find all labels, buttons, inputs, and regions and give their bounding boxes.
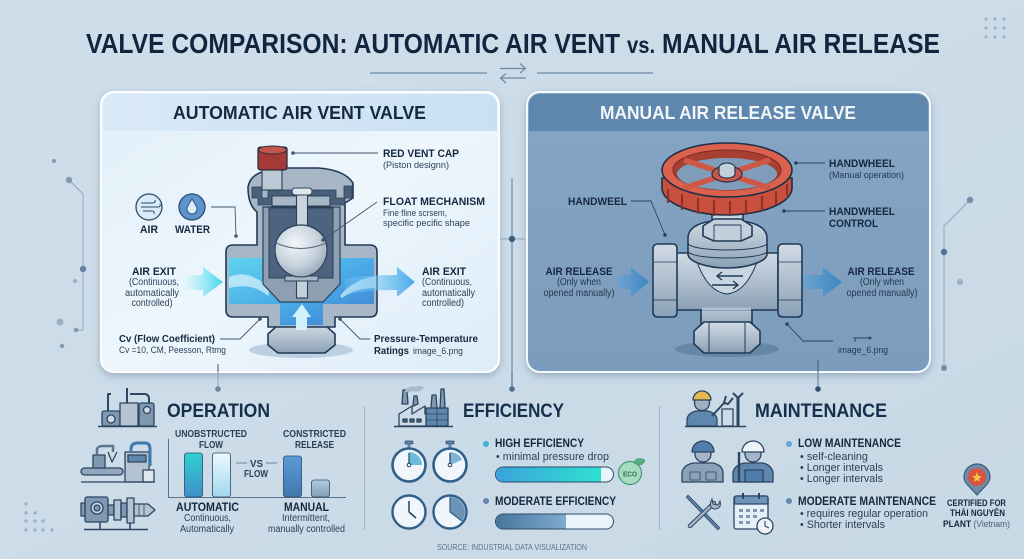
icon: factory bbox=[394, 386, 453, 426]
arrow: left air release bbox=[618, 267, 649, 297]
bar chart: flow comparison: VS bbox=[250, 459, 263, 470]
block: moderate maintenance: • requires regular operation bbox=[800, 508, 928, 520]
label: air exit left bbox=[125, 266, 179, 309]
block: high efficiency: HIGH EFFICIENCY bbox=[495, 438, 584, 450]
section: maintenance bbox=[682, 391, 1010, 534]
block: high efficiency: • minimal pressure drop bbox=[496, 451, 609, 463]
label: image file reference: image_6.png bbox=[838, 345, 888, 356]
top guide bbox=[272, 196, 330, 206]
handwheel inner wall bbox=[673, 150, 781, 190]
label: air exit left: controlled) bbox=[132, 298, 172, 309]
icon: engineer with wrenches bbox=[685, 391, 746, 426]
label: pressure-temperature ratings: Pressure-Temperature bbox=[374, 333, 478, 345]
label: air release right bbox=[846, 266, 918, 299]
right end nut bbox=[778, 244, 802, 317]
icon: clock moderate left bbox=[392, 496, 426, 528]
panel heading: MANUAL AIR RELEASE VALVE bbox=[600, 103, 856, 123]
bar chart: flow comparison: FLOW bbox=[199, 440, 223, 451]
caption: manual bbox=[268, 502, 345, 535]
label: air release right: AIR RELEASE bbox=[848, 266, 914, 278]
arrow: right air flow out bbox=[345, 267, 415, 297]
block: moderate maintenance: MODERATE MAINTENANCE bbox=[798, 496, 936, 508]
block: high efficiency bbox=[483, 438, 614, 482]
block: low maintenance: • Longer intervals bbox=[800, 473, 883, 485]
bar chart: flow comparison: RELEASE bbox=[295, 440, 334, 451]
block: low maintenance bbox=[786, 438, 901, 485]
label: air exit left: (Continuous, bbox=[129, 277, 179, 288]
decoration: operation dot bbox=[215, 386, 221, 392]
label: pressure-temperature ratings bbox=[338, 317, 478, 357]
icon: stopwatch high left bbox=[392, 441, 426, 482]
section: efficiency bbox=[392, 386, 645, 552]
decoration: section dividers bbox=[364, 406, 660, 530]
label: handweel bbox=[568, 196, 667, 237]
label: flow coefficient: Cv (Flow Coefficient) bbox=[119, 333, 215, 345]
legend: air and water: WATER bbox=[175, 224, 210, 236]
label: air exit right: automatically bbox=[422, 288, 475, 299]
label: air exit right: controlled) bbox=[422, 298, 464, 309]
label: handwheel manual operation: HANDWHEEL bbox=[829, 158, 895, 170]
label: air exit right bbox=[422, 266, 475, 309]
caption: manual: MANUAL bbox=[284, 502, 329, 514]
handwheel opening bbox=[677, 158, 777, 190]
legend: air and water: AIR bbox=[140, 224, 158, 236]
label: air release left: opened manually) bbox=[544, 288, 614, 299]
icon: eco badge: ECO bbox=[623, 470, 637, 478]
block: low maintenance: LOW MAINTENANCE bbox=[798, 438, 901, 450]
label: float mechanism bbox=[321, 196, 485, 242]
label: air exit left: AIR EXIT bbox=[132, 266, 176, 278]
bar chart: flow comparison: UNOBSTRUCTED bbox=[175, 429, 247, 440]
decoration: right circuit line bbox=[941, 197, 973, 371]
label: flow coefficient bbox=[119, 317, 262, 355]
icon: calendar with clock bbox=[734, 493, 773, 534]
caption: manual: manually controlled bbox=[268, 524, 345, 535]
panel background bbox=[101, 92, 499, 372]
label: air exit right: AIR EXIT bbox=[422, 266, 466, 278]
handwheel lower rim bbox=[662, 178, 792, 215]
label: air exit left: automatically bbox=[125, 288, 179, 299]
decoration: top right dots bbox=[984, 18, 1006, 38]
label: air release left bbox=[544, 266, 614, 299]
icon: location pin Vietnam bbox=[964, 464, 990, 495]
caption: automatic: Automatically bbox=[180, 524, 234, 535]
neck bbox=[712, 213, 743, 223]
bar chart: flow comparison bbox=[168, 429, 346, 498]
title: VALVE COMPARISON: AUTOMATIC AIR VENT vs. MANUAL AIR RELEASE bbox=[86, 28, 940, 59]
label: handwheel manual operation bbox=[794, 158, 904, 181]
icon: clock moderate right bbox=[434, 496, 466, 528]
decoration: left circuit line bbox=[52, 159, 86, 348]
hub bbox=[712, 166, 742, 182]
red vent cap bbox=[258, 147, 287, 170]
icon: conveyor and robot arm bbox=[81, 443, 155, 482]
icon: automatic valve cross-section bbox=[226, 146, 377, 358]
label: handwheel control: HANDWHEEL bbox=[829, 206, 895, 218]
bonnet bbox=[688, 220, 767, 268]
icon: manual valve with handwheel bbox=[653, 143, 802, 357]
block: moderate efficiency bbox=[483, 496, 616, 529]
horizontal pipe bbox=[675, 253, 778, 310]
caption: manual: Intermittent, bbox=[282, 513, 330, 524]
lower stem bbox=[296, 276, 308, 298]
icon: worker left bbox=[682, 441, 723, 482]
label: handwheel manual operation: (Manual operation) bbox=[829, 170, 904, 181]
label: image file reference bbox=[785, 322, 888, 356]
decoration: panel bottom connectors bbox=[218, 360, 818, 389]
block: moderate efficiency: MODERATE EFFICIENCY bbox=[495, 496, 616, 508]
caption: automatic: Continuous, bbox=[184, 513, 231, 524]
center body bulge bbox=[697, 262, 757, 294]
decoration: center connector bbox=[499, 178, 525, 392]
label: air release left: (Only when bbox=[557, 277, 601, 288]
label: air release left: AIR RELEASE bbox=[546, 266, 612, 278]
vent neck bbox=[262, 168, 282, 190]
icon: title swap arrows divider bbox=[370, 64, 653, 83]
legend: air and water bbox=[136, 194, 238, 238]
chamber dark cavity bbox=[269, 208, 333, 278]
label: air release right: opened manually) bbox=[846, 288, 918, 299]
label: air release right: (Only when bbox=[860, 277, 904, 288]
caption: automatic: AUTOMATIC bbox=[176, 502, 239, 514]
block: moderate maintenance bbox=[786, 496, 936, 531]
section: operation bbox=[81, 388, 346, 535]
block: low maintenance: • self-cleaning bbox=[800, 451, 868, 463]
icon: worker right bbox=[733, 441, 773, 482]
packing hex nut bbox=[703, 219, 752, 241]
bar chart: flow comparison: CONSTRICTED bbox=[283, 429, 346, 440]
panel: automatic air vent valve bbox=[101, 92, 499, 372]
icon: stopwatch high right bbox=[434, 441, 466, 482]
float ball bbox=[275, 225, 327, 277]
valve body bbox=[226, 168, 377, 327]
label: handwheel control bbox=[782, 206, 895, 230]
up arrow bbox=[292, 304, 311, 330]
icon: water drop bbox=[179, 194, 205, 220]
source note: SOURCE: INDUSTRIAL DATA VISUALIZATION bbox=[437, 542, 587, 552]
label: handwheel control: CONTROL bbox=[829, 218, 878, 230]
hub cap bbox=[719, 163, 735, 178]
panel heading: AUTOMATIC AIR VENT VALVE bbox=[173, 103, 426, 123]
heading: efficiency: EFFICIENCY bbox=[463, 400, 564, 422]
bar chart: flow comparison: FLOW bbox=[244, 469, 268, 480]
handwheel upper rim bbox=[662, 143, 792, 197]
bottom hex nut bbox=[268, 325, 335, 353]
label: float mechanism: FLOAT MECHANISM bbox=[383, 196, 485, 208]
lower branch bbox=[701, 297, 752, 329]
label: flow coefficient: Cv =10, CM, Peesson, Rtmg bbox=[119, 345, 226, 355]
label: float mechanism: specific pecific shape bbox=[383, 218, 470, 229]
panel header band bbox=[529, 94, 928, 131]
label: pressure-temperature ratings: image_6.png bbox=[413, 346, 463, 357]
heading: maintenance: MAINTENANCE bbox=[755, 400, 887, 422]
handwheel spokes bbox=[684, 160, 770, 188]
label: air exit right: (Continuous, bbox=[422, 277, 472, 288]
flow arrows bbox=[712, 272, 743, 289]
label: red vent cap: (Piston designn) bbox=[383, 160, 449, 171]
label: pressure-temperature ratings: Ratings bbox=[374, 345, 409, 357]
block: moderate maintenance: • Shorter intervals bbox=[800, 519, 885, 531]
icon: crossed tools bbox=[688, 497, 720, 528]
arrow: right air release bbox=[803, 267, 842, 297]
decoration: maintenance dot bbox=[815, 386, 821, 392]
decoration: bottom left dots bbox=[24, 502, 54, 532]
panel header band bbox=[103, 94, 497, 131]
inner chamber wall bbox=[263, 207, 340, 302]
icon: air bbox=[136, 194, 162, 220]
heading: operation: OPERATION bbox=[167, 400, 270, 422]
panel: manual air release valve bbox=[527, 92, 930, 372]
badge: certified plant bbox=[943, 498, 1010, 530]
badge: certified plant: CERTIFIED FOR bbox=[947, 498, 1006, 509]
bottom nut bbox=[694, 322, 760, 353]
label: red vent cap: RED VENT CAP bbox=[383, 148, 459, 160]
dome cavity bbox=[252, 186, 352, 205]
icon: pump motor bbox=[81, 497, 155, 530]
arrow: left air flow in bbox=[182, 267, 223, 297]
icon: eco badge bbox=[618, 459, 645, 484]
icon: plant machine bbox=[98, 388, 157, 426]
label: handweel: HANDWEEL bbox=[568, 196, 627, 208]
badge: certified plant: PLANT (Vietnam) bbox=[943, 519, 1010, 530]
badge: certified plant: THÁI NGUYÊN bbox=[950, 507, 1005, 519]
left end nut bbox=[653, 244, 677, 317]
caption: automatic bbox=[176, 502, 239, 535]
flow swoosh highlights bbox=[229, 274, 376, 298]
water passage bbox=[229, 258, 374, 325]
block: low maintenance: • Longer intervals bbox=[800, 462, 883, 474]
label: float mechanism: Fine fline scrsem, bbox=[383, 208, 447, 219]
label: red vent cap bbox=[291, 148, 459, 171]
float stem bbox=[296, 192, 308, 228]
panel background bbox=[527, 92, 930, 372]
